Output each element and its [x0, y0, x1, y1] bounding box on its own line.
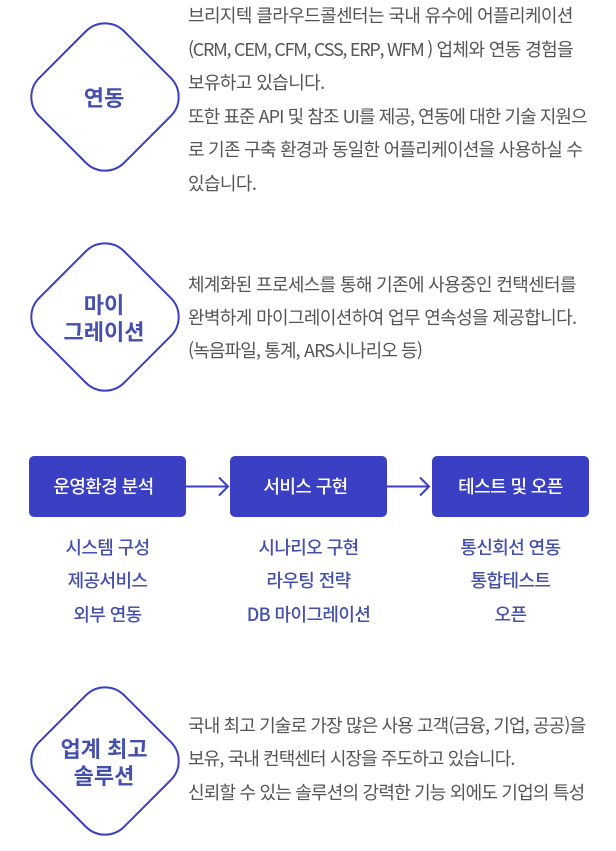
text block: 솔루션 description: 신뢰할 수 있는 솔루션의 강력한 기능 외에도 기업의 특성 [188, 779, 584, 805]
heading: 업계 최고 솔루션 [60, 732, 148, 791]
process box: 테스트 및 오픈: 테스트 및 오픈 [458, 473, 563, 499]
list: step 2 items: DB 마이그레이션 [247, 601, 370, 627]
heading: 업계 최고 솔루션: 솔루션 [74, 759, 134, 791]
text block: 연동 description [188, 2, 587, 196]
list: step 2 items: 시나리오 구현 [258, 534, 359, 560]
heading: 마이그레이션: 그레이션 [64, 315, 144, 347]
text block: 연동 description: (CRM, CEM, CFM, CSS, ERP, WFM ) 업체와 연동 경험을 [188, 36, 573, 62]
arrow: step 2 to 3 [387, 476, 430, 496]
text block: 마이그레이션 description: 완벽하게 마이그레이션하여 업무 연속성을 제공합니다. [188, 304, 576, 330]
heading: 업계 최고 솔루션: 업계 최고 [60, 732, 148, 764]
heading: 마이그레이션: 마이 [84, 288, 124, 320]
text block: 마이그레이션 description: (녹음파일, 통계, ARS시나리오 등) [188, 337, 422, 363]
list: step 1 items: 시스템 구성 [65, 534, 150, 560]
text block: 솔루션 description: 국내 최고 기술로 가장 많은 사용 고객(금융, 기업, 공공)을 [188, 712, 585, 738]
list: step 3 items [460, 534, 561, 627]
text block: 솔루션 description: 보유, 국내 컨택센터 시장을 주도하고 있습니다. [188, 745, 514, 771]
list: step 3 items: 오픈 [495, 601, 526, 627]
text block: 연동 description: 또한 표준 API 및 참조 UI를 제공, 연동에 대한 기술 지원으 [188, 103, 587, 129]
text block: 연동 description: 브리지텍 클라우드콜센터는 국내 유수에 어플리케이션 [188, 2, 573, 28]
list: step 2 items [247, 534, 370, 627]
icon: diamond badge 연동 [30, 22, 180, 172]
text block: 마이그레이션 description: 체계화된 프로세스를 통해 기존에 사용중인 컨택센터를 [188, 271, 576, 297]
arrow: step 1 to 2 [186, 476, 230, 496]
text block: 솔루션 description [188, 712, 586, 805]
list: step 2 items: 라우팅 전략 [266, 567, 351, 593]
process box: 서비스 구현 [230, 456, 387, 517]
text block: 연동 description: 있습니다. [188, 170, 256, 196]
list: step 1 items: 외부 연동 [73, 601, 142, 627]
process box: 테스트 및 오픈 [432, 456, 589, 517]
icon: diamond badge 업계 최고 솔루션 [30, 686, 180, 836]
icon: diamond badge 마이그레이션 [30, 242, 180, 392]
list: step 1 items: 제공서비스 [68, 567, 147, 593]
list: step 3 items: 통합테스트 [471, 567, 550, 593]
text block: 마이그레이션 description [188, 271, 576, 363]
list: step 3 items: 통신회선 연동 [460, 534, 561, 560]
process box: 운영환경 분석 [29, 456, 186, 517]
heading: 연동: 연동 [84, 81, 124, 113]
process box: 서비스 구현: 서비스 구현 [263, 473, 348, 499]
text block: 연동 description: 로 기존 구축 환경과 동일한 어플리케이션을 사용하실 수 [188, 136, 582, 162]
process box: 운영환경 분석: 운영환경 분석 [53, 473, 154, 499]
heading: 마이그레이션 [64, 288, 144, 347]
text block: 연동 description: 보유하고 있습니다. [188, 69, 325, 95]
list: step 1 items [65, 534, 150, 627]
